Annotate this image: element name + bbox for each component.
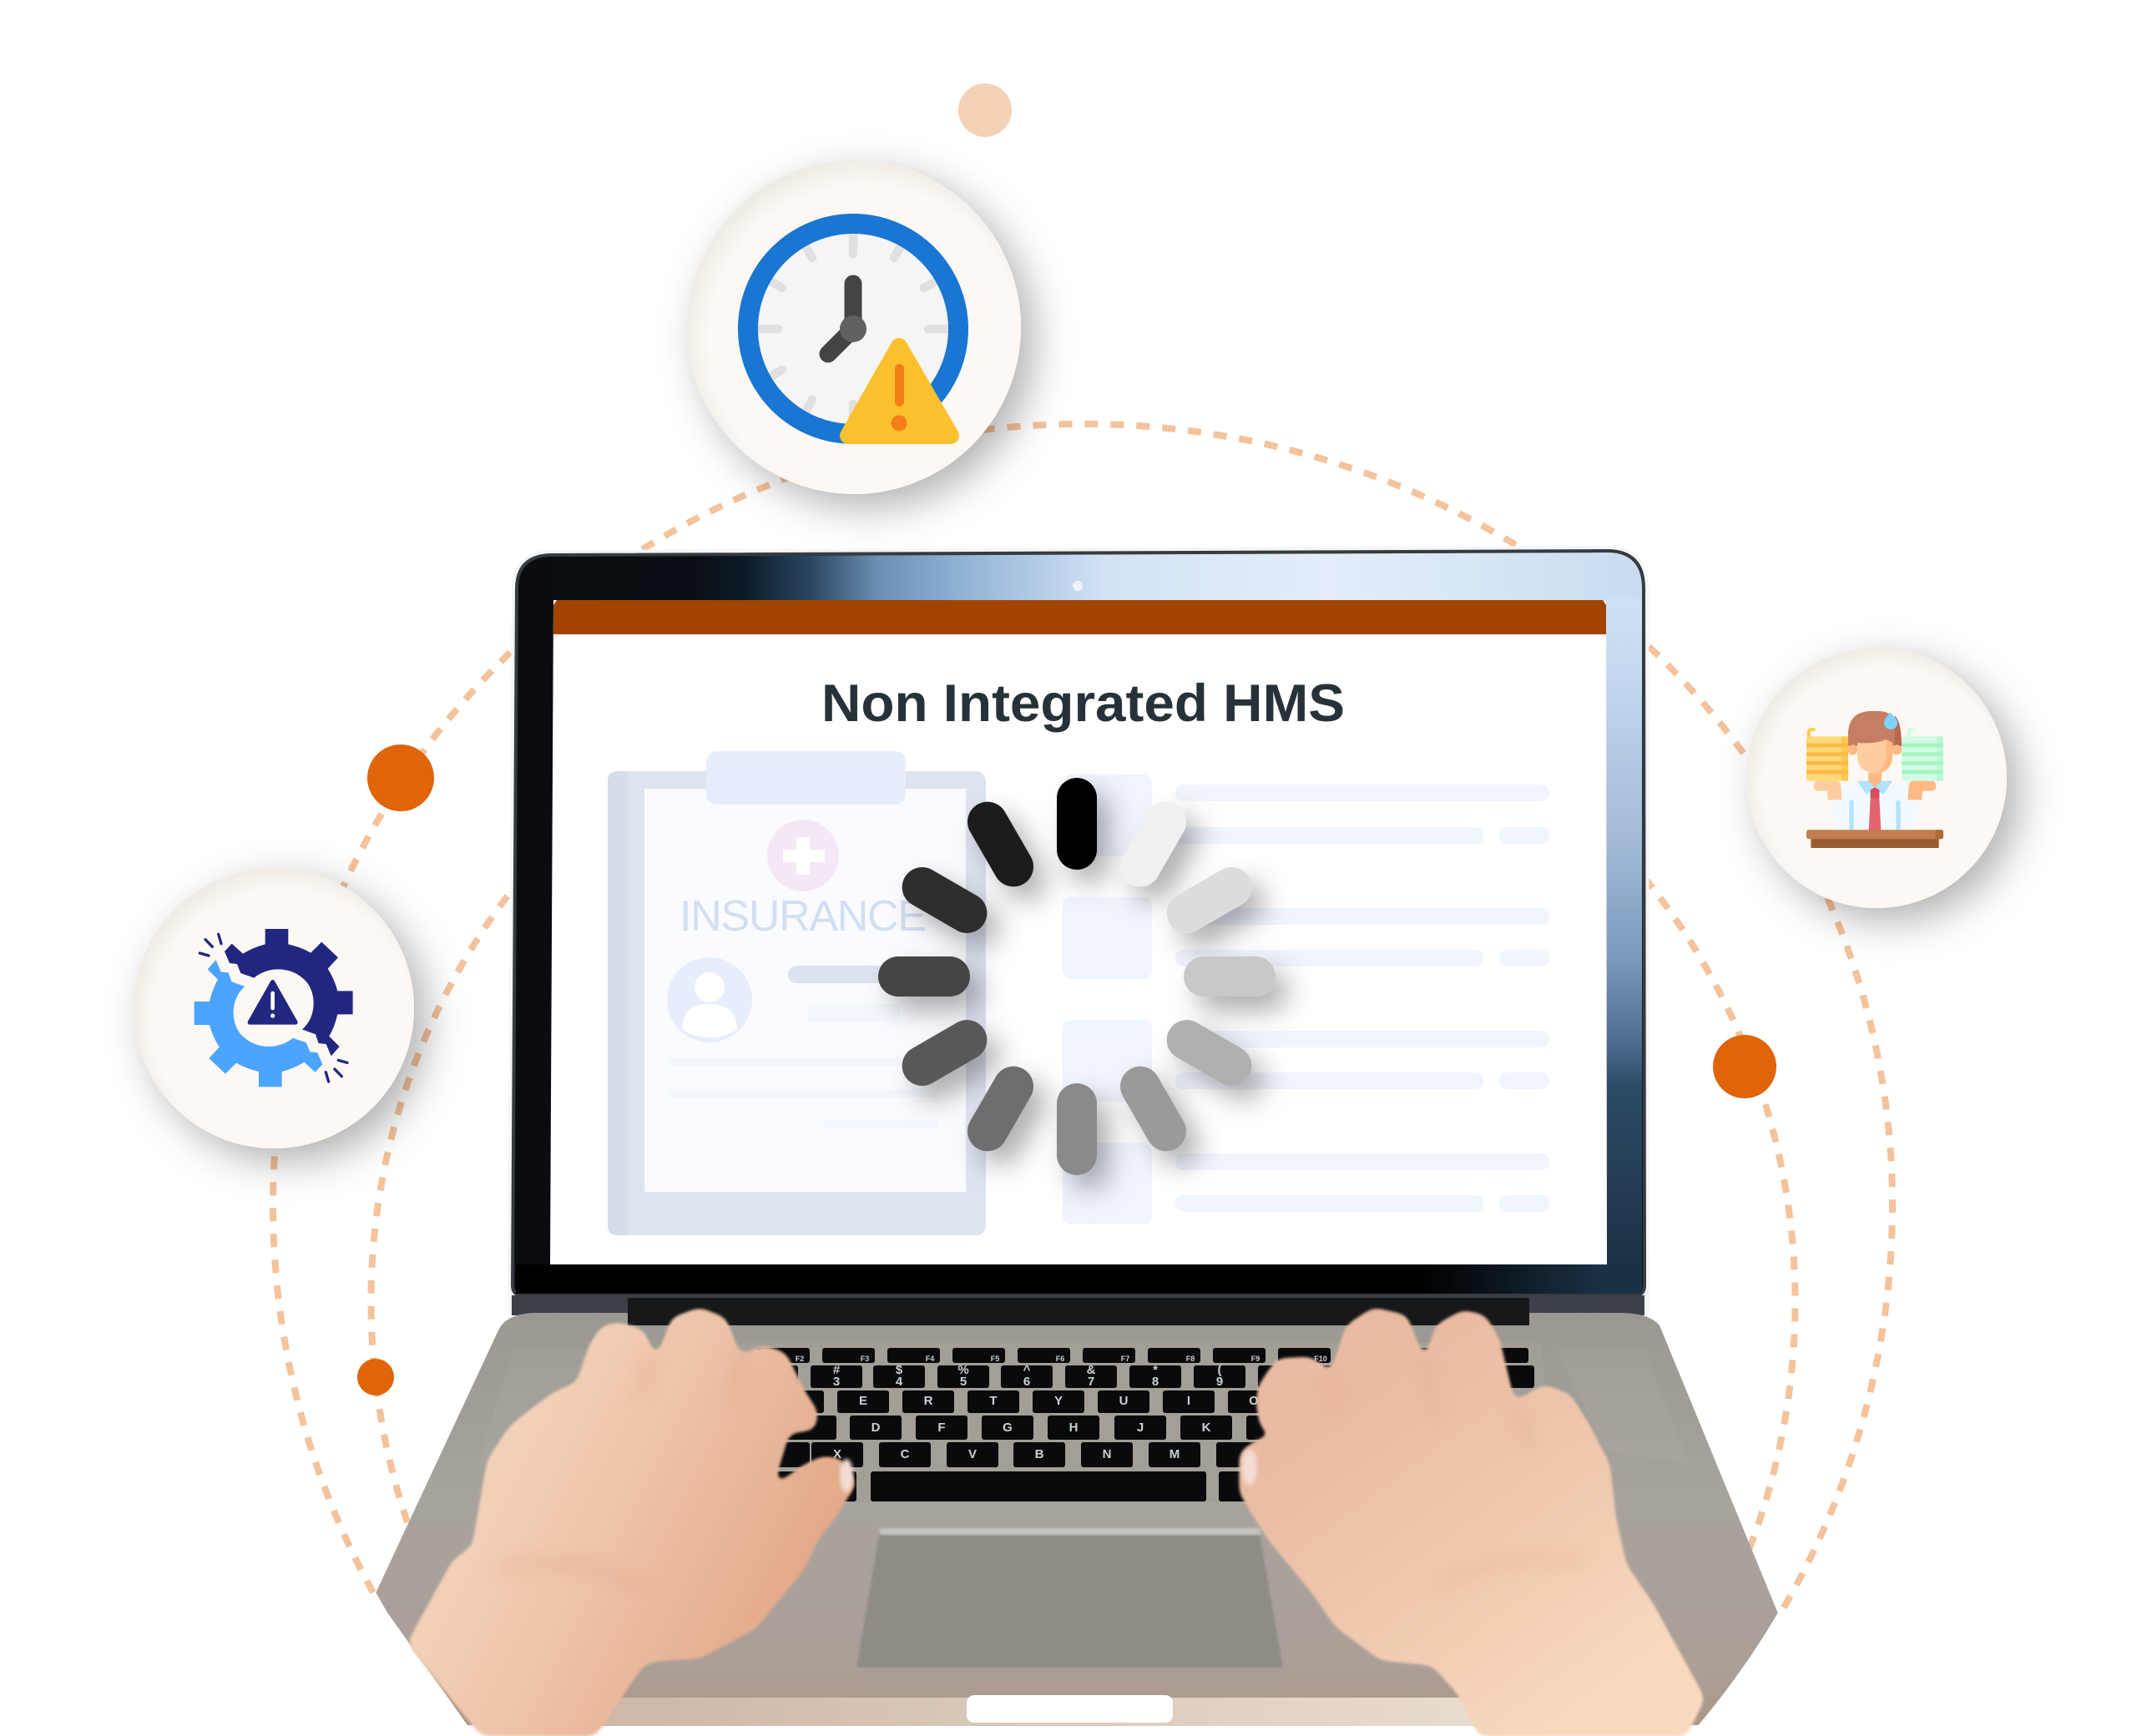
key labels: 5 bbox=[960, 1375, 967, 1389]
key labels: Y bbox=[1054, 1394, 1063, 1408]
key labels: K bbox=[1202, 1421, 1211, 1435]
key labels: E bbox=[859, 1394, 867, 1408]
speaker grille left bbox=[476, 1350, 588, 1469]
decorative dot: orange left bbox=[367, 744, 434, 811]
key labels: * bbox=[1153, 1363, 1158, 1377]
key labels: X bbox=[833, 1447, 841, 1461]
decorative dot: orange small bbox=[357, 1359, 394, 1395]
key labels: F2 bbox=[796, 1355, 804, 1363]
key labels: B bbox=[1035, 1447, 1044, 1461]
key labels: N bbox=[1103, 1447, 1111, 1461]
key labels bbox=[796, 1355, 1327, 1461]
key labels: F3 bbox=[861, 1355, 869, 1363]
collar and tie bbox=[1857, 781, 1892, 795]
sweat drop bbox=[1884, 712, 1897, 729]
keyboard keys bbox=[746, 1348, 1534, 1501]
left thumb nail bbox=[840, 1459, 853, 1492]
shirt bbox=[1829, 785, 1921, 830]
screen background bbox=[550, 600, 1607, 1264]
avatar bbox=[667, 957, 752, 1042]
decorative dot: beige bbox=[958, 83, 1012, 137]
function key row bbox=[757, 1348, 1528, 1363]
icon: clock with warning bbox=[687, 160, 1021, 494]
right hand bbox=[1240, 1308, 1705, 1736]
decorative dot: orange right bbox=[1713, 1035, 1776, 1098]
trackpad bbox=[856, 1528, 1283, 1668]
head bbox=[1847, 744, 1857, 754]
hinge bbox=[628, 1298, 1529, 1325]
key labels: H bbox=[1069, 1421, 1078, 1435]
green document bbox=[1902, 729, 1943, 781]
number key row bbox=[746, 1365, 1534, 1388]
key labels: # bbox=[833, 1363, 841, 1377]
key labels: 7 bbox=[1088, 1375, 1094, 1389]
laptop lid bbox=[513, 551, 1644, 1310]
webcam bbox=[1073, 581, 1083, 591]
front edge bbox=[602, 1695, 1474, 1726]
insurance label: INSURANCE bbox=[679, 892, 927, 941]
letter key row 2 bbox=[785, 1416, 1298, 1440]
right thumb nail bbox=[1242, 1449, 1257, 1486]
key labels: U bbox=[1119, 1394, 1128, 1408]
laptop base bbox=[375, 1313, 1780, 1725]
speaker grille right bbox=[1555, 1349, 1690, 1464]
desk bbox=[1806, 830, 1943, 848]
key labels: F9 bbox=[1251, 1355, 1260, 1363]
key labels: O bbox=[1249, 1394, 1259, 1408]
icon: stressed clerk with paperwork bbox=[1746, 648, 2007, 908]
laptop screen bbox=[550, 600, 1607, 1264]
key labels: 8 bbox=[1152, 1375, 1159, 1389]
key labels: $ bbox=[896, 1363, 903, 1377]
left hand bbox=[407, 1308, 856, 1736]
key labels: T bbox=[989, 1394, 998, 1408]
medical cross badge bbox=[767, 820, 839, 891]
insurance clipboard bbox=[608, 751, 986, 1235]
key labels: F4 bbox=[926, 1355, 934, 1363]
key labels: C bbox=[901, 1447, 910, 1461]
screen header bar bbox=[553, 600, 1606, 634]
key labels: & bbox=[1087, 1363, 1096, 1377]
key labels: 9 bbox=[1216, 1375, 1223, 1389]
key labels: G bbox=[1003, 1421, 1013, 1435]
key labels: F bbox=[937, 1421, 946, 1435]
dashed orbit paths bbox=[273, 424, 1892, 1616]
front edge notch bbox=[967, 1695, 1173, 1723]
letter key row 3 bbox=[776, 1442, 1268, 1467]
key labels: R bbox=[924, 1394, 933, 1408]
key labels: I bbox=[1187, 1394, 1190, 1408]
key labels: ( bbox=[1217, 1363, 1222, 1377]
key labels: F7 bbox=[1121, 1355, 1129, 1363]
key labels: F10 bbox=[1314, 1355, 1327, 1363]
record list placeholder bbox=[1063, 775, 1549, 1224]
key labels: % bbox=[957, 1363, 969, 1377]
key labels: F8 bbox=[1186, 1355, 1195, 1363]
icon: broken gear bbox=[134, 868, 414, 1148]
letter key row 1 bbox=[772, 1390, 1345, 1413]
key labels: ^ bbox=[1023, 1363, 1031, 1377]
hair bbox=[1848, 711, 1902, 746]
key labels: M bbox=[1170, 1447, 1180, 1461]
screen title: Non Integrated HMS bbox=[821, 674, 1345, 733]
yellow document bbox=[1806, 729, 1848, 781]
key labels: D bbox=[871, 1421, 881, 1435]
loading spinner bbox=[878, 778, 1276, 1175]
key labels: V bbox=[968, 1447, 977, 1461]
key labels: F6 bbox=[1056, 1355, 1064, 1363]
lid lower strip bbox=[512, 1295, 1644, 1315]
arms bbox=[1814, 781, 1842, 800]
key labels: J bbox=[1137, 1421, 1144, 1435]
key labels: 6 bbox=[1023, 1375, 1030, 1389]
key labels: 4 bbox=[896, 1375, 903, 1389]
keyboard tray bbox=[735, 1343, 1561, 1502]
laptop bbox=[375, 551, 1780, 1736]
key labels: F5 bbox=[991, 1355, 999, 1363]
space bar row bbox=[776, 1471, 1260, 1501]
key labels: 3 bbox=[833, 1375, 840, 1389]
